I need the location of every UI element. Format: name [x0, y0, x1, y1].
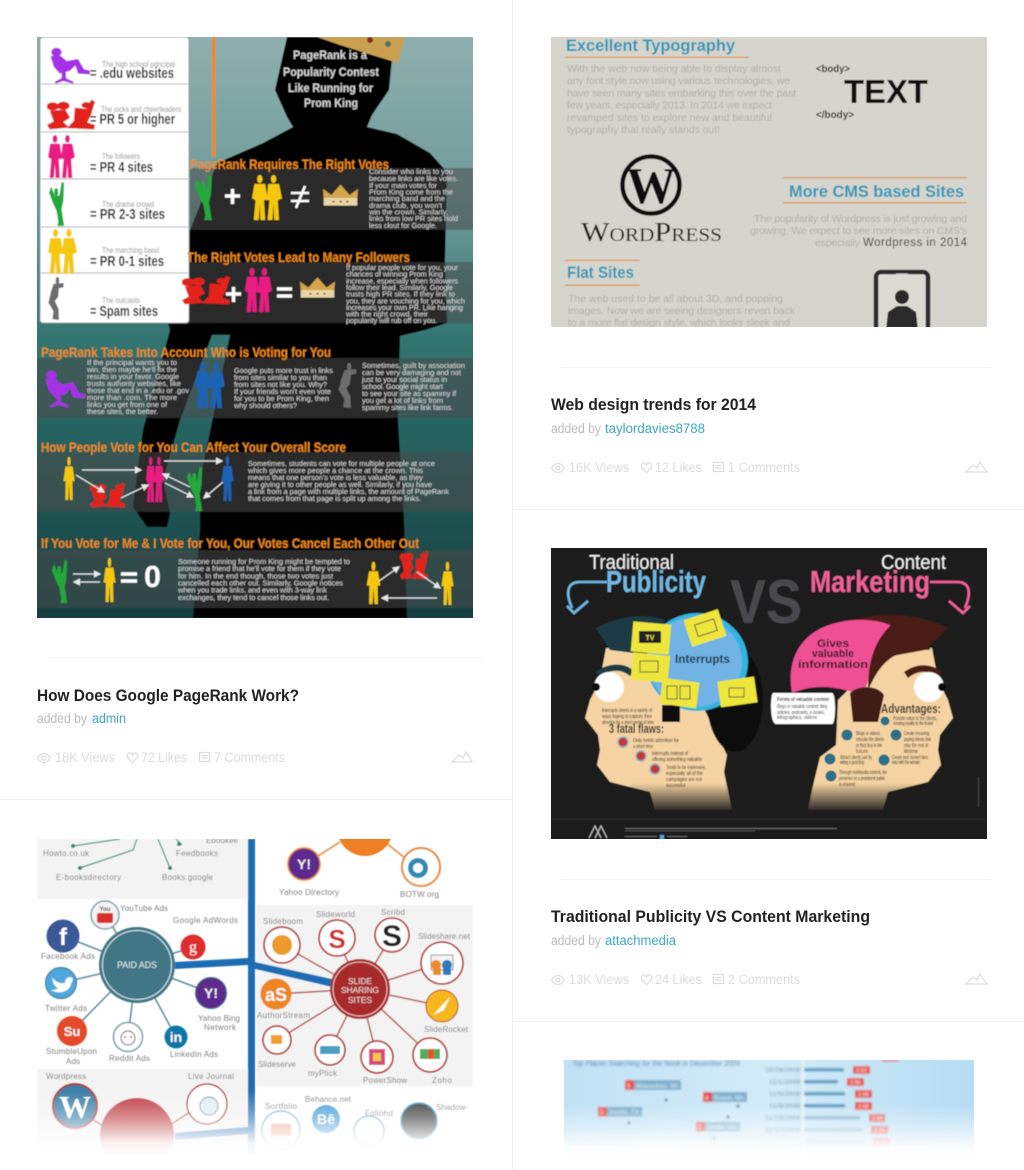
card border: card 3	[513, 1021, 1024, 1022]
column divider	[512, 0, 513, 1170]
left head: Only holds attention for	[633, 738, 679, 744]
fade at neck	[630, 783, 920, 813]
hub: blog sites (fading): Foliohd	[365, 1109, 393, 1118]
section: who is voting: these sites, the better.	[87, 407, 158, 416]
section: who is voting: school. Google might start	[362, 382, 443, 391]
directory branch: Yahoo Directory	[279, 888, 339, 897]
card border: card 1	[0, 799, 512, 800]
card border: card 2	[513, 509, 1024, 510]
hub: slide sharing sites: AuthorStream	[257, 1011, 310, 1020]
section: right votes: less clout for Google.	[369, 221, 437, 230]
right head: Create and convert fans	[892, 755, 928, 761]
hub: blog sites (fading): Shadow-	[436, 1103, 468, 1112]
heading: content marketing: Marketing	[810, 564, 930, 599]
hub: slide sharing sites: SHARING	[341, 985, 379, 995]
hub: slide sharing sites: aS	[265, 985, 287, 1005]
hub: paid ads: Google AdWords	[173, 916, 238, 925]
legend panel: = PR 2-3 sites	[90, 207, 165, 223]
section: who is voting: results in your favor. Google	[87, 372, 179, 381]
section: votes cancel: when you trade links, and even with 3-way link	[177, 586, 327, 595]
right head	[771, 615, 953, 810]
byline: attachmedia: attachmedia	[605, 933, 676, 948]
hub: blog sites (fading): Wordpress	[46, 1072, 86, 1081]
section: how people vote	[41, 439, 449, 511]
section: right votes: because links are like votes.	[369, 174, 458, 183]
orange rule	[212, 37, 216, 157]
section: who is voting: If your friends won't even vote	[234, 387, 331, 396]
bar chart: 11/17/2009	[765, 1127, 800, 1134]
panel: traditional publicity vs content marketing thumbnail	[551, 548, 987, 839]
left head: campaigns are not	[666, 777, 702, 783]
legend panel: = Spam sites	[90, 304, 158, 320]
byline: taylordavies8788: added by	[551, 421, 601, 436]
section: how people vote: a link from a page with multiple links, the amount of PageRank	[248, 487, 449, 496]
hub: slide sharing sites: S	[328, 924, 346, 954]
section: who is voting: trusts authority websites, like	[87, 379, 181, 388]
section: followers: If popular people vote for you, your	[346, 263, 459, 272]
text sample: TEXT	[844, 73, 928, 110]
section: followers: follow their lead. Similarly, Google	[346, 283, 453, 292]
stats row: card 2: 12 Likes	[655, 460, 702, 475]
title: Prom King	[304, 96, 358, 110]
hub: slide sharing sites: Slideserve	[258, 1060, 297, 1069]
heading: CMS: More CMS based Sites	[789, 182, 964, 201]
directory branch: Y!	[297, 856, 311, 872]
legend panel: The drama crowd	[102, 200, 154, 209]
heading: typography: Excellent Typography	[566, 36, 736, 55]
section: who is voting: to see your site as spammy if	[362, 389, 457, 398]
legend panel: The outcasts	[102, 296, 140, 305]
text: CMS	[750, 213, 968, 249]
section: who is voting: can be very damaging and not	[362, 368, 461, 377]
hub: slide sharing sites: Slideshare.net	[418, 932, 471, 941]
text: flat sites: to a more flat design style, which looks sleek and	[568, 317, 790, 329]
section: right votes: Consider who links to you	[369, 167, 453, 176]
icon: WordPress logo: WordPress	[581, 217, 722, 247]
hub: slide sharing sites: myPlick	[308, 1069, 338, 1078]
section: who is voting: win, then maybe he'll fix the	[86, 365, 177, 374]
bar chart: 2.68	[858, 1104, 869, 1110]
section: right votes: If your main votes for	[369, 181, 438, 190]
stats row: card 1: 7 Comments	[214, 750, 285, 765]
text: CMS: growing. We expect to see more sites on CMS's	[750, 225, 967, 237]
section: votes cancel: exchanges, they tend to cancel those links out.	[178, 593, 329, 602]
left head: a short time	[633, 744, 653, 750]
right head: lifetime	[904, 749, 918, 755]
text: typography: have seen many sites embarking this over the past	[567, 87, 796, 99]
icon: phone	[876, 272, 928, 336]
hub: blog sites (fading): Bē	[317, 1111, 335, 1127]
chart title: Top Places Searching for the Nook in December 2009	[572, 1058, 740, 1068]
panel: web design trends thumbnail	[551, 36, 987, 329]
bar chart: 2.76	[874, 1128, 885, 1134]
fade overlay	[30, 1090, 480, 1170]
heading: flat sites	[565, 260, 640, 286]
hub: paid ads: You	[100, 907, 111, 913]
legend panel: = PR 5 or higher	[90, 112, 175, 128]
hub: slide sharing sites: PowerShow	[363, 1076, 407, 1085]
left head: Interrupts	[675, 652, 730, 666]
hub: paid ads: Y!	[204, 985, 218, 1001]
map markers: Milwaukee, WI	[636, 1084, 678, 1090]
hub: slide sharing sites: Slideboom	[263, 917, 303, 926]
hub: slide sharing sites: SLIDE	[348, 976, 372, 986]
section: followers: trusts high PR sites. If they link to	[346, 290, 455, 299]
right head: Provide value to the clients,	[893, 716, 937, 722]
heading: content marketing	[810, 552, 970, 613]
right head: infographics, videos	[777, 715, 817, 721]
top branch: Books.google	[162, 873, 214, 882]
right head: Advantages:	[881, 702, 941, 716]
heading: content marketing: Content	[881, 552, 946, 574]
text sample	[816, 63, 928, 121]
left head: TV	[646, 635, 655, 642]
section: votes cancel: 0	[144, 559, 161, 594]
divider: card 1	[47, 657, 483, 658]
top branch: Howto.co.uk	[43, 849, 90, 858]
map markers: 3	[600, 1110, 604, 1116]
bar chart: 11/5/2009	[769, 1091, 800, 1098]
section: right votes: drama club, you won't	[369, 201, 442, 210]
right head: educate the clients	[856, 737, 884, 743]
hub: paid ads: YouTube Ads	[120, 904, 168, 913]
section: right votes: win the crown. Similarly,	[368, 208, 448, 216]
legend panel: The high school principal	[102, 60, 175, 69]
section: who is voting: Sometimes, guilt by association	[362, 361, 465, 370]
bar chart: 2.56	[850, 1080, 861, 1086]
card title: PageRank: How Does Google PageRank Work?	[37, 686, 299, 705]
right head: Blogs or valuable content: blog	[777, 704, 827, 710]
right head: links with the website	[892, 760, 920, 766]
top branch: E-booksdirectory	[56, 873, 121, 882]
bar chart: 11/13/2009	[765, 1115, 800, 1122]
section: right votes: Prom King come from the	[369, 188, 453, 196]
right head: information	[798, 659, 868, 671]
title: Popularity Contest	[283, 65, 379, 79]
section: how people vote: are giving it to other people as well. Similarly, if you have	[248, 480, 432, 489]
title: PageRank is a	[293, 48, 367, 62]
stats row: card 1: 72 Likes	[141, 750, 187, 765]
stats row: card 3: 13K Views	[569, 972, 629, 987]
right head: is ensured	[839, 782, 855, 788]
right head: writing a good blog	[839, 760, 864, 766]
fade overlay	[555, 1105, 985, 1170]
card title: publicity vs marketing: Traditional Publicity VS Content Marketing	[551, 907, 870, 926]
section: followers: increases your own PR. Like hanging	[346, 303, 463, 312]
right head: Forms of valuable content	[777, 697, 829, 703]
text: CMS: especially	[815, 237, 861, 249]
panel: PageRank infographic thumbnail	[37, 37, 473, 618]
bar chart: 2.75	[876, 1140, 887, 1146]
directory branch: BOTW.org	[400, 890, 439, 899]
right head: Blogs or videos	[856, 731, 880, 737]
hub: slide sharing sites: SITES	[348, 995, 372, 1005]
section: right votes: links from low PR sites hold	[369, 214, 458, 223]
bar chart: 2.58	[872, 1116, 883, 1122]
hub: paid ads: in	[170, 1029, 182, 1045]
bar chart: 11/1/2009	[769, 1079, 800, 1086]
text: CMS: Wordpress in 2014	[863, 237, 968, 249]
stats row: card 2: 16K Views	[569, 460, 629, 475]
section: who is voting: more than .com. The more	[87, 393, 177, 402]
top branch	[43, 836, 239, 882]
top branch: Ebookee	[206, 836, 239, 845]
hub: blog sites (fading): Behance.net	[305, 1095, 352, 1104]
right head: articles, podcasts, e-books,	[777, 710, 825, 716]
text: flat sites: The web used to be all about 3D, and popping	[568, 293, 783, 305]
section: votes cancel: for him. In the end though, those two votes just	[178, 571, 333, 580]
hub: paid ads: LinkedIn Ads	[170, 1050, 218, 1059]
right head: Through multimedia content, the	[839, 770, 887, 776]
section: who is voting: from sites not like you. Why?	[234, 380, 327, 389]
left head: Interrupts instead of	[652, 751, 688, 757]
hub: slide sharing sites: S	[382, 920, 402, 953]
title	[283, 48, 379, 110]
section: how people vote: that comes from that page is split up among the links.	[248, 494, 421, 503]
text: typography: typography that really stands out!	[567, 124, 720, 136]
right head: paying clients that	[904, 737, 931, 743]
bar chart: 11/9/2009	[769, 1103, 800, 1110]
section: followers: with the right crowd, their	[345, 310, 429, 319]
hub: paid ads: Reddit Ads	[109, 1054, 150, 1063]
panel: link building mind map thumbnail	[37, 836, 472, 1150]
left head	[585, 609, 763, 810]
trunk lines	[175, 839, 332, 1154]
text: typography: With the web now being able to display almost	[567, 63, 781, 75]
title: Like Running for	[288, 81, 373, 95]
byline: attachmedia: added by	[551, 933, 601, 948]
byline: admin: added by	[37, 711, 87, 726]
section: right votes: PageRank Requires The Right Votes	[190, 156, 389, 172]
hub: paid ads	[41, 901, 240, 1066]
section: followers	[182, 249, 465, 325]
stats row: card 1: 18K Views	[55, 750, 115, 765]
section: who is voting: If the principal wants you to	[87, 358, 177, 367]
hub: paid ads: Twitter Ads	[45, 1004, 87, 1013]
icon: WordPress logo: W	[626, 158, 676, 215]
section: how people vote: Sometimes, students can vote for multiple people at once	[248, 459, 435, 468]
hub: paid ads: Facebook Ads	[41, 952, 95, 961]
map markers: Austin, TX	[609, 1110, 639, 1116]
right head: Attract clients just by	[840, 755, 872, 761]
hub: slide sharing sites	[257, 908, 471, 1085]
bar chart	[765, 1060, 890, 1160]
legend panel: The followers	[102, 152, 140, 161]
heading: VS: VS	[730, 568, 802, 637]
text sample: </body>	[816, 109, 854, 121]
right head: presence on a prominent public	[839, 776, 885, 782]
hub: paid ads: Ads	[66, 1057, 80, 1066]
map markers: 5	[627, 1084, 631, 1090]
hub: blog sites (fading): W	[59, 1089, 91, 1125]
panel: top places chart thumbnail	[564, 1058, 974, 1146]
legend panel: The jocks and cheerleaders	[101, 105, 181, 114]
section: who is voting: just to your social status in	[361, 375, 447, 384]
stats row: card 2	[552, 460, 987, 475]
text: flat sites: images. Now we are seeing designers revert back	[568, 305, 796, 317]
section: who is voting: links you get from one of	[87, 400, 168, 409]
hub: paid ads: PAID ADS	[117, 960, 157, 970]
section: who is voting: for you to be Prom King, then	[234, 394, 329, 403]
map markers: Seattle, WA	[707, 1125, 737, 1131]
left head: offering something valuable	[652, 757, 702, 763]
divider: card 2	[561, 367, 991, 368]
card title: web design trends: Web design trends for 2014	[551, 395, 756, 414]
stats row: card 2: 1 Comments	[728, 460, 800, 475]
section: followers: you, they are vouching for you, which	[346, 296, 465, 305]
hub: blog sites (fading): Live Journal	[188, 1072, 234, 1081]
hub: paid ads: Yahoo Bing	[198, 1014, 240, 1023]
section: votes cancel: Someone running for Prom King might be tempted to	[178, 557, 350, 566]
hub: blog sites (fading): Sortfolio	[265, 1102, 298, 1111]
left head: Interrupts clients in a variety of	[602, 708, 652, 714]
bar chart: 2.62	[856, 1068, 867, 1074]
section: who is voting: from sites similar to you than	[234, 373, 327, 382]
byline: taylordavies8788: taylordavies8788	[605, 421, 705, 436]
crown	[317, 37, 405, 63]
left head: especially all of the	[666, 771, 703, 777]
top branch: Feedbooks	[176, 849, 218, 858]
text: typography: few years, especially 2013. In 2014 we expect	[567, 100, 772, 112]
legend panel	[40, 37, 189, 323]
legend panel: = PR 4 sites	[90, 160, 153, 176]
right head: or they buy in the	[856, 743, 882, 749]
stats row: card 3: 24 Likes	[655, 972, 702, 987]
hub: blog sites (fading)	[46, 1072, 468, 1170]
left head: Tends to be expensive,	[666, 765, 706, 771]
hub: paid ads: f	[59, 924, 68, 951]
map markers: 4	[705, 1096, 709, 1102]
section: followers: popularity will rub off on you.	[346, 316, 437, 325]
left head: attention for a short period of time	[602, 720, 654, 726]
hub: slide sharing sites: SlideRocket	[424, 1025, 469, 1034]
section bands	[37, 168, 473, 608]
stats row: card 3: 2 Comments	[728, 972, 800, 987]
left head: 3 fatal flaws:	[609, 721, 664, 736]
section: votes cancel	[41, 535, 454, 605]
heading: traditional publicity: Publicity	[606, 564, 707, 599]
silhouette	[133, 37, 447, 618]
heading: traditional publicity: Traditional	[589, 552, 674, 574]
right head: stay the rest of	[904, 743, 928, 749]
map markers: Boston, MA	[714, 1096, 744, 1102]
right head: creating loyalty to the brand	[893, 721, 933, 727]
section: followers: The Right Votes Lead to Many Followers	[187, 249, 410, 265]
hub: paid ads: Su	[64, 1024, 80, 1039]
right head: Gives	[817, 638, 849, 650]
text: typography: revamped sites to explore new and beautiful	[567, 112, 772, 124]
text: typography: any font style now using various technologies, we	[567, 75, 790, 87]
section: who is voting: spammy sites like link farms.	[362, 403, 453, 412]
stats row: card 1	[38, 750, 472, 765]
hub: paid ads: Network	[204, 1023, 237, 1032]
text sample: <body>	[816, 63, 850, 75]
footer strip	[545, 777, 995, 842]
right head: Create recurring,	[904, 731, 930, 737]
hub: slide sharing sites: Zoho	[432, 1076, 453, 1085]
bar chart: 2.68	[858, 1092, 869, 1098]
icon: WordPress logo	[581, 156, 722, 247]
right head: valuable	[812, 648, 854, 660]
section: who is voting: those that end in a .edu or .gov	[87, 386, 189, 395]
section: how people vote: means that one person's vote is less valuable, as they	[248, 473, 423, 482]
directory branch	[279, 800, 440, 899]
section: followers: chances of winning Prom King	[346, 270, 443, 279]
left head: ways hoping to capture their	[601, 714, 652, 720]
section: who is voting: you get a lot of links from	[362, 396, 443, 405]
section: followers: increase, especially when followers	[346, 276, 458, 285]
hub: paid ads: g	[189, 939, 197, 956]
right head: future	[856, 749, 868, 755]
section: who is voting: Google puts more trust in links	[234, 366, 333, 375]
legend panel: = .edu websites	[90, 66, 174, 82]
divider: card 3	[561, 879, 991, 880]
legend panel: The marching band	[102, 246, 159, 255]
section: who is voting: PageRank Takes Into Account Who is Voting for You	[41, 344, 331, 360]
section: how people vote: How People Vote for You Can Affect Your Overall Score	[41, 439, 346, 455]
section: votes cancel: cancelled each other out. Similarly, Google notices	[178, 578, 343, 588]
section: right votes	[190, 156, 458, 230]
left head: successful	[666, 783, 685, 789]
map markers: 2	[698, 1125, 702, 1131]
stats row: card 3	[552, 972, 987, 987]
section: who is voting	[41, 344, 465, 416]
hub: paid ads: StumbleUpon	[46, 1047, 97, 1056]
section: how people vote: which gives more people a chance at the crown. This	[247, 466, 423, 475]
section: votes cancel: promise a friend that he'll vote for them if they vote	[178, 564, 341, 573]
hub: slide sharing sites: Slideworld	[316, 910, 355, 919]
heading: traditional publicity	[567, 552, 707, 613]
legend panel: = PR 0-1 sites	[90, 254, 164, 270]
section: who is voting: why should others?	[233, 401, 297, 410]
map markers	[598, 1080, 747, 1155]
hub: slide sharing sites: Scribd	[381, 908, 405, 917]
heading: flat sites: Flat Sites	[567, 263, 634, 282]
byline: admin: admin	[92, 711, 126, 726]
bar chart: 10/28/2009	[765, 1067, 800, 1074]
text: CMS: The popularity of Wordpress is just growing and	[754, 213, 967, 225]
section: right votes: marching band and the	[369, 194, 445, 203]
